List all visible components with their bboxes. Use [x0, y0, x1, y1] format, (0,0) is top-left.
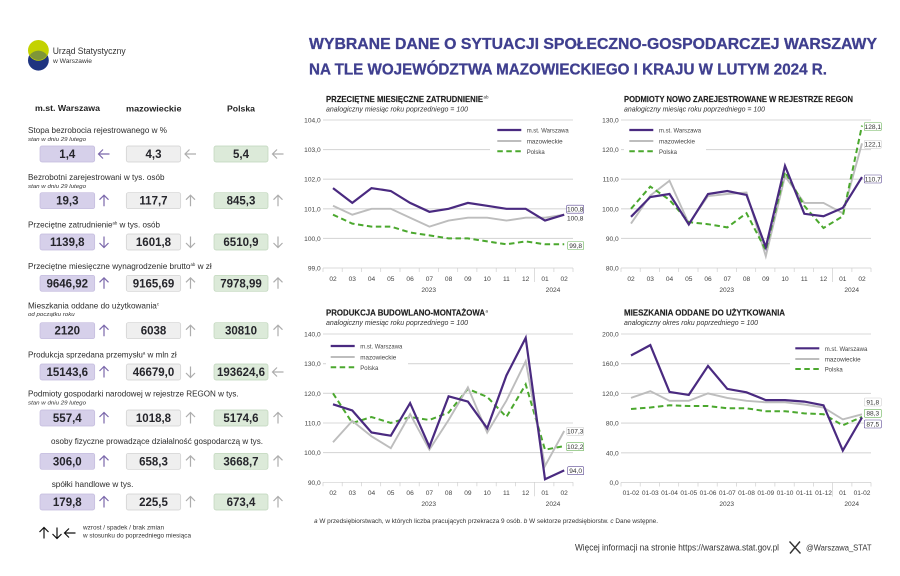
x axis labels: 08 — [445, 276, 453, 283]
indicator: osoby fizyczne: 658,3 — [139, 456, 168, 468]
indicator: podmioty gospodarki narodowej: Podmioty gospodarki narodowej w rejestrze REGON w tys. — [28, 389, 239, 399]
x axis labels: 07 — [426, 276, 433, 283]
x axis labels: 01 — [541, 276, 549, 283]
y axis labels — [602, 332, 619, 487]
end value labels: 107,3 — [567, 429, 584, 436]
end value labels: 102,2 — [567, 444, 584, 451]
x axis labels: 09 — [464, 490, 472, 497]
end value labels: 122,1 — [865, 142, 881, 149]
arrow legend — [40, 524, 191, 540]
end value labels: 128,1 — [865, 124, 881, 131]
chart title: MIESZKANIA ODDANE DO UŻYTKOWANIA — [624, 308, 785, 318]
y axis labels: 120,0 — [602, 147, 619, 154]
x axis labels: 01-05 — [680, 490, 698, 497]
indicator: wynagrodzenie — [28, 261, 282, 291]
indicator: spółki handlowe: spółki handlowe w tys. — [52, 479, 133, 489]
indicator: podmioty gospodarki narodowej: 1018,8 — [136, 413, 172, 425]
legend: m.st. Warszawa — [527, 128, 569, 134]
indicator: mieszkania oddane: c — [157, 302, 160, 307]
legend — [790, 342, 872, 375]
x axis labels: 01-07 — [719, 490, 736, 497]
chart: mieszkania oddane do użytkowania — [602, 308, 881, 508]
x axis labels: 08 — [743, 276, 750, 283]
x axis labels: 03 — [647, 276, 654, 283]
x axis labels: 10 — [484, 490, 491, 497]
indicator: bezrobotni zarejestrowani: 19,3 — [56, 196, 78, 208]
indicator: wynagrodzenie: w zł — [195, 261, 212, 271]
chart title — [624, 308, 785, 327]
y axis labels: 80,0 — [606, 421, 619, 428]
x axis labels — [329, 276, 568, 294]
x axis labels: 04 — [368, 490, 375, 497]
x axis labels: 01 — [541, 490, 549, 497]
line: Polska — [333, 215, 564, 244]
legend — [624, 124, 706, 157]
indicator: mieszkania oddane: 30810 — [225, 326, 257, 338]
y axis labels: 100,0 — [602, 206, 619, 213]
end value labels — [864, 122, 881, 183]
indicator: bezrobotni zarejestrowani — [28, 172, 282, 209]
footnote: a W przedsiębiorstwach, w których liczba pracujących przekracza 9 osób. b W sektorze przedsiębiorstw. c Dane wstępne. — [314, 518, 658, 525]
chart title: analogiczny miesiąc roku poprzedniego = 100 — [326, 106, 468, 114]
x axis labels: 05 — [685, 276, 693, 283]
x axis labels: 01-12 — [815, 490, 832, 497]
indicator: podmioty gospodarki narodowej: 5174,6 — [223, 413, 259, 425]
x axis labels: 02 — [858, 276, 866, 283]
icon: X logo — [790, 542, 800, 554]
x axis labels: 01-10 — [777, 490, 794, 497]
indicator: spółki handlowe: 673,4 — [227, 497, 256, 509]
legend: mazowieckie — [360, 354, 397, 362]
x axis labels — [329, 490, 568, 508]
y axis labels: 99,0 — [308, 266, 321, 272]
x axis labels: 02 — [329, 276, 337, 283]
y axis labels: 130,0 — [304, 361, 321, 368]
legend: m.st. Warszawa — [360, 344, 403, 350]
indicator: wynagrodzenie: ab — [190, 262, 196, 267]
line: mazowieckie — [333, 361, 564, 466]
line: Polska — [333, 384, 564, 450]
y axis labels: 102,0 — [304, 177, 321, 184]
end value labels: 88,3 — [866, 411, 880, 418]
indicator: produkcja sprzedana: 193624,6 — [217, 367, 265, 379]
x axis labels: 02 — [329, 490, 337, 497]
indicator: przeciętne zatrudnienie: 6510,9 — [223, 237, 259, 249]
x axis labels — [627, 276, 866, 294]
chart title: a — [486, 308, 488, 314]
x axis labels: 01-08 — [738, 490, 755, 497]
indicator: produkcja sprzedana: w mln zł — [145, 349, 177, 359]
x axis labels: 10 — [484, 276, 491, 283]
indicator: osoby fizyczne: osoby fizyczne prowadzące działalność gospodarczą w tys. — [51, 436, 263, 446]
x axis labels: 02 — [561, 276, 568, 283]
x axis labels: 09 — [762, 276, 770, 283]
x axis labels — [623, 490, 871, 508]
end value labels — [567, 205, 584, 250]
end value labels: 100,8 — [567, 206, 584, 214]
y axis labels: 120,0 — [304, 391, 321, 398]
title: NA TLE WOJEWÓDZTWA MAZOWIECKIEGO I KRAJU W LUTYM 2024 R. — [309, 60, 827, 78]
y axis labels — [304, 118, 321, 272]
indicator: osoby fizyczne: 3668,7 — [223, 456, 259, 468]
x axis labels: 04 — [368, 276, 375, 283]
x axis labels: 2023 — [719, 287, 734, 294]
indicator: mieszkania oddane: od początku roku — [28, 312, 75, 318]
y axis labels: 100,0 — [304, 450, 321, 457]
x axis labels: 05 — [387, 276, 395, 283]
x axis labels: 07 — [724, 276, 731, 283]
chart: podmioty nowo zarejestrowane — [602, 94, 881, 294]
indicator: bezrobotni zarejestrowani: Bezrobotni zarejestrowani w tys. osób — [28, 172, 165, 182]
legend: Polska — [527, 149, 545, 156]
y axis labels: 110,0 — [603, 177, 619, 184]
indicator: bezrobotni zarejestrowani: stan w dniu 29 lutego — [28, 184, 86, 190]
chart title: ab — [484, 94, 489, 100]
x axis labels: 01-09 — [757, 490, 775, 497]
indicator: osoby fizyczne — [40, 436, 282, 469]
line: mazowieckie — [631, 143, 862, 256]
indicator: produkcja sprzedana: a — [143, 350, 146, 355]
title: WYBRANE DANE O SYTUACJI SPOŁECZNO-GOSPODARCZEJ WARSZAWY — [309, 36, 877, 53]
x axis labels: 07 — [426, 490, 433, 497]
x axis labels: 01-02 — [623, 490, 640, 497]
indicator: stopa bezrobocia: 1,4 — [59, 149, 76, 161]
indicator: osoby fizyczne: 306,0 — [53, 456, 82, 468]
x axis labels: 10 — [781, 276, 789, 283]
x axis labels: 06 — [704, 276, 712, 283]
indicator: przeciętne zatrudnienie: ab — [113, 220, 118, 226]
x axis labels: 12 — [820, 276, 827, 283]
end value labels: 87,5 — [866, 421, 880, 428]
indicator: wynagrodzenie: Przeciętne miesięczne wynagrodzenie brutto — [28, 261, 197, 271]
indicator: przeciętne zatrudnienie: Przeciętne zatrudnienie — [28, 220, 117, 230]
x axis labels: 12 — [522, 490, 530, 497]
indicator: stopa bezrobocia: 5,4 — [233, 149, 250, 161]
x axis labels: 2024 — [546, 501, 561, 508]
column headings: Polska — [227, 104, 255, 114]
chart title: PRODUKCJA BUDOWLANO-MONTAŻOWA — [326, 308, 485, 318]
column headings: m.st. Warszawa — [35, 103, 100, 113]
social handle: @Warszawa_STAT — [806, 542, 872, 552]
indicator: bezrobotni zarejestrowani: 845,3 — [227, 196, 255, 208]
chart title: PRZECIĘTNE MIESIĘCZNE ZATRUDNIENIE — [326, 94, 483, 104]
end value labels: 99,8 — [569, 243, 582, 250]
line: m.st. Warszawa — [631, 345, 862, 451]
end value labels: 110,7 — [865, 176, 881, 183]
legend: mazowieckie — [825, 356, 861, 364]
indicator: mieszkania oddane: 2120 — [55, 326, 80, 338]
indicator: spółki handlowe: 225,5 — [139, 497, 168, 509]
x axis labels: 01-06 — [700, 490, 717, 497]
column headings — [35, 103, 255, 114]
line: Polska — [631, 126, 862, 250]
x axis labels: 05 — [387, 490, 395, 497]
indicator: podmioty gospodarki narodowej — [28, 389, 282, 426]
chart title — [624, 94, 853, 114]
chart title: analogiczny okres roku poprzedniego = 100 — [624, 320, 758, 327]
chart title — [326, 94, 489, 114]
x axis labels: 01-11 — [796, 490, 813, 497]
y axis labels: 0,0 — [610, 480, 619, 487]
indicator: mieszkania oddane: 6038 — [141, 326, 167, 338]
indicator: produkcja sprzedana: Produkcja sprzedana przemysłu — [28, 349, 149, 359]
end value labels: 91,8 — [866, 399, 880, 406]
line: mazowieckie — [333, 206, 564, 227]
indicator: produkcja sprzedana: 46679,0 — [133, 367, 174, 379]
x axis labels: 12 — [522, 276, 530, 283]
legend: mazowieckie — [527, 138, 563, 146]
x axis labels: 11 — [503, 490, 510, 497]
end value labels — [567, 427, 584, 475]
indicator: przeciętne zatrudnienie: w tys. osób — [117, 220, 160, 230]
legend: Polska — [659, 149, 677, 156]
x axis labels: 11 — [503, 276, 510, 283]
indicator: wynagrodzenie: 7978,99 — [220, 278, 262, 290]
logo: Urząd Statystyczny w Warszawie: w Warszawie — [52, 58, 92, 65]
end value labels: 100,8 — [567, 215, 584, 222]
x axis labels: 09 — [464, 276, 472, 283]
y axis labels: 160,0 — [602, 361, 619, 368]
x axis labels: 11 — [801, 276, 808, 283]
end value labels — [864, 398, 881, 428]
chart title: analogiczny miesiąc roku poprzedniego = 100 — [624, 106, 765, 114]
x axis labels: 02 — [627, 276, 635, 283]
x axis labels: 2024 — [546, 287, 561, 294]
arrow legend: w stosunku do poprzedniego miesiąca — [82, 532, 191, 540]
y axis labels: 110,0 — [305, 420, 321, 428]
indicator: produkcja sprzedana — [28, 349, 284, 380]
chart: przeciętne miesięczne zatrudnienie — [304, 94, 584, 294]
y axis labels: 101,0 — [304, 206, 321, 213]
x axis labels: 06 — [406, 276, 414, 283]
logo: Urząd Statystyczny w Warszawie: Urząd Statystyczny — [53, 46, 126, 56]
indicator: spółki handlowe — [40, 479, 282, 510]
y axis labels: 200,0 — [602, 332, 619, 338]
x axis labels: 2023 — [421, 287, 436, 294]
indicator: mieszkania oddane: Mieszkania oddane do użytkowania — [28, 301, 162, 311]
chart title: analogiczny miesiąc roku poprzedniego = 100 — [326, 320, 468, 327]
x axis labels: 02 — [561, 490, 568, 497]
legend — [326, 340, 408, 373]
y axis labels: 40,0 — [606, 450, 619, 457]
y axis labels — [602, 118, 619, 272]
legend: m.st. Warszawa — [825, 346, 868, 353]
y axis labels: 80,0 — [606, 266, 619, 272]
end value labels: 94,0 — [569, 468, 582, 475]
indicator: stopa bezrobocia — [28, 125, 284, 162]
x axis labels: 01-02 — [854, 490, 871, 497]
y axis labels — [304, 332, 321, 487]
indicator: spółki handlowe: 179,8 — [53, 497, 82, 509]
x axis labels: 01-04 — [661, 490, 678, 497]
legend: m.st. Warszawa — [659, 128, 701, 134]
x axis labels: 03 — [349, 276, 356, 283]
y axis labels: 140,0 — [304, 332, 321, 338]
line: Polska — [631, 405, 862, 425]
x axis labels: 2024 — [844, 287, 859, 294]
x axis labels: 01-03 — [642, 490, 659, 497]
y axis labels: 103,0 — [304, 147, 321, 154]
indicator: stopa bezrobocia: 4,3 — [146, 149, 162, 161]
indicator: produkcja sprzedana: 15143,6 — [47, 367, 88, 379]
legend: mazowieckie — [659, 138, 695, 146]
chart title — [326, 308, 488, 327]
indicator: podmioty gospodarki narodowej: 557,4 — [53, 413, 82, 425]
indicator: przeciętne zatrudnienie — [28, 220, 282, 250]
indicator: podmioty gospodarki narodowej: stan w dniu 29 lutego — [28, 401, 86, 407]
indicator: stopa bezrobocia: Stopa bezrobocia rejestrowanego w % — [28, 125, 167, 135]
arrow legend: wzrost / spadek / brak zmian — [82, 524, 164, 532]
more information link text: Więcej informacji na stronie https://warszawa.stat.gov.pl — [575, 542, 779, 552]
indicator: stopa bezrobocia: stan w dniu 29 lutego — [28, 137, 86, 143]
x axis labels: 03 — [349, 490, 356, 497]
legend — [490, 124, 574, 157]
x axis labels: 2023 — [719, 501, 734, 508]
y axis labels: 100,0 — [304, 236, 321, 243]
indicator: bezrobotni zarejestrowani: 117,7 — [139, 196, 168, 208]
x axis labels: 01 — [839, 490, 847, 497]
line: mazowieckie — [631, 391, 862, 419]
line: m.st. Warszawa — [631, 166, 862, 247]
line: m.st. Warszawa — [333, 338, 564, 479]
line: m.st. Warszawa — [333, 188, 564, 221]
indicator: przeciętne zatrudnienie: 1601,8 — [136, 237, 172, 249]
indicator: mieszkania oddane — [28, 301, 282, 339]
y axis labels: 104,0 — [304, 118, 321, 124]
x axis labels: 2023 — [421, 501, 436, 508]
indicator: wynagrodzenie: 9165,69 — [133, 278, 174, 290]
y axis labels: 120,0 — [602, 391, 619, 398]
y axis labels: 90,0 — [308, 480, 321, 487]
x axis labels: 06 — [406, 490, 414, 497]
legend: Polska — [825, 366, 843, 374]
column headings: mazowieckie — [126, 104, 182, 114]
logo: Urząd Statystyczny w Warszawie — [28, 40, 126, 71]
x axis labels: 08 — [445, 490, 453, 497]
x axis labels: 04 — [666, 276, 673, 283]
legend: Polska — [360, 365, 379, 372]
chart title: PODMIOTY NOWO ZAREJESTROWANE W REJESTRZE REGON — [624, 94, 853, 104]
y axis labels: 130,0 — [602, 118, 619, 124]
title — [309, 36, 877, 78]
x axis labels: 01 — [839, 276, 847, 283]
indicator: wynagrodzenie: 9646,92 — [47, 278, 88, 290]
indicator: przeciętne zatrudnienie: 1139,8 — [50, 237, 85, 249]
y axis labels: 90,0 — [606, 236, 619, 243]
x axis labels: 2024 — [844, 501, 859, 508]
chart: produkcja budowlano-montażowa — [304, 308, 584, 508]
